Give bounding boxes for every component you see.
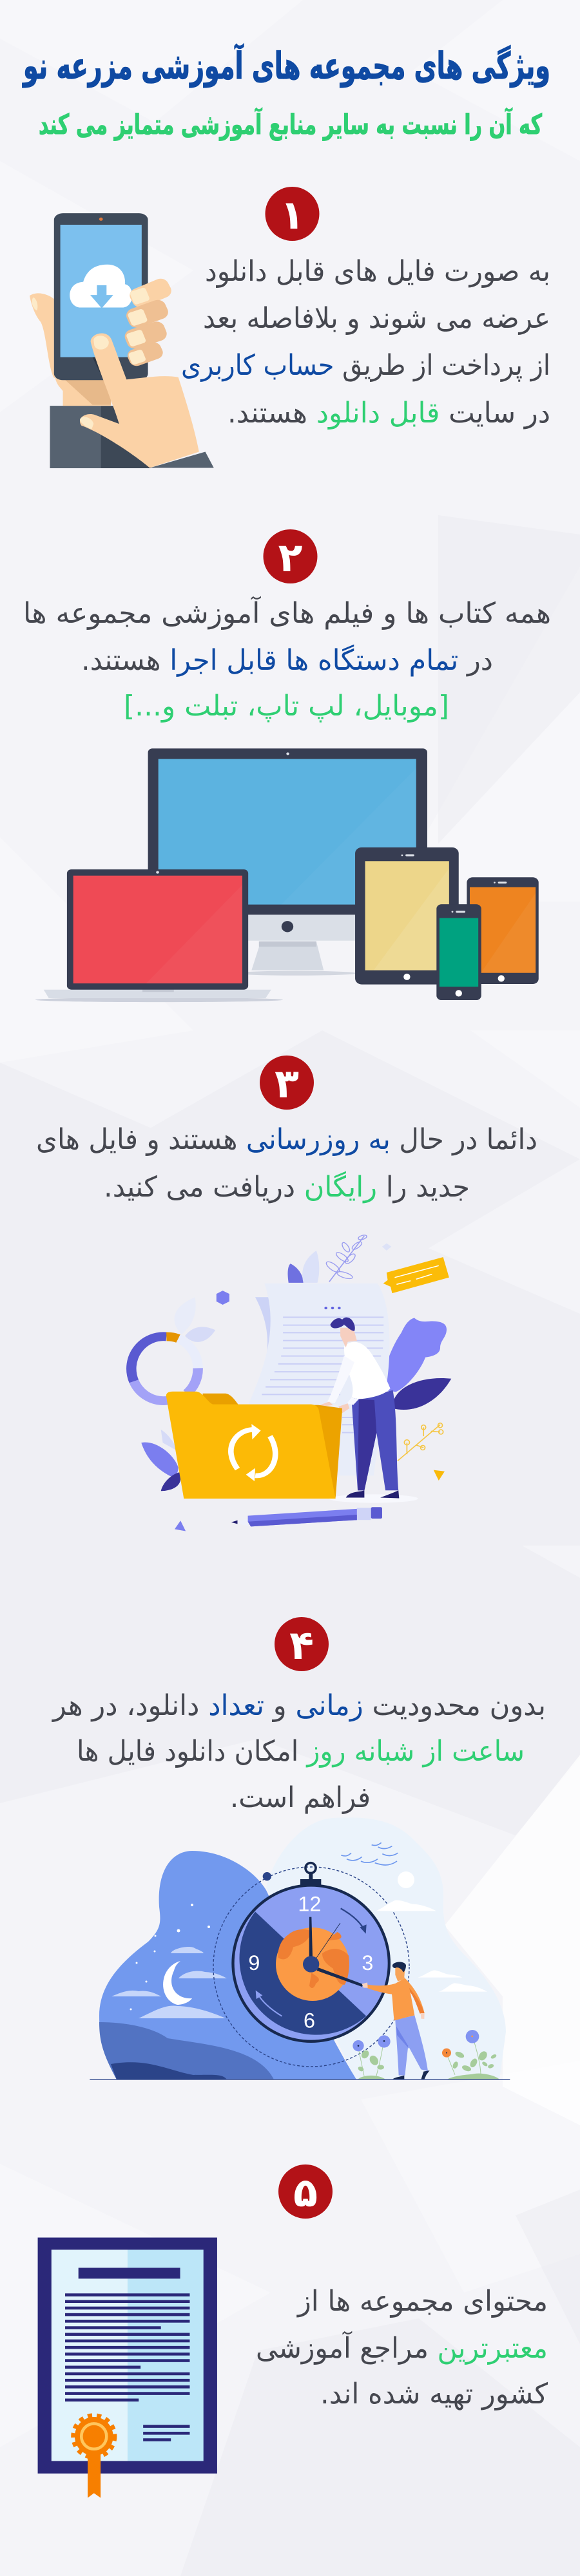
note tag: [383, 1257, 449, 1293]
number badge 4: [275, 1617, 329, 1671]
clock numerals: 9: [248, 1951, 260, 1975]
text: section 1: عرضه می شوند و بلافاصله بعد: [203, 302, 550, 335]
clock numerals: 6: [304, 2009, 315, 2032]
text: section 3: دائما در حال به روزرسانی هستند و فایل های: [36, 1123, 537, 1156]
text: section 1: از پرداخت از طریق حساب کاربری: [181, 349, 550, 382]
clock numerals: 12: [298, 1892, 321, 1915]
illustration: certificate: [38, 2237, 217, 2498]
text: section 5: کشور تهیه شده اند.: [320, 2378, 548, 2410]
text: section 1: [181, 255, 550, 430]
text: section 2: [23, 596, 551, 723]
flowers: [353, 2030, 499, 2079]
number badge 1: ۱: [280, 191, 304, 238]
number badge 3: [260, 1056, 314, 1110]
document: [249, 1283, 390, 1475]
clock body and faces, zoom frame: [90, 1842, 510, 2080]
illustration: clock: [90, 1817, 510, 2080]
number badge 2: ۲: [278, 534, 303, 581]
clock hands: [303, 1917, 363, 1987]
icon: hand holding phone: [30, 213, 214, 468]
person: [320, 1318, 418, 1503]
text: section 5: معتبرترین مراجع آموزشی: [256, 2331, 548, 2365]
number badge 5: [278, 2164, 333, 2219]
folder: [141, 1392, 342, 1499]
number badge 4: ۴: [289, 1622, 314, 1669]
orbit path: [213, 1867, 409, 2067]
leaves and decorations: [175, 1234, 451, 1531]
text: section 3: جدید را رایگان دریافت می کنید.: [104, 1171, 470, 1204]
text: section 4: بدون محدودیت زمانی و تعداد دانلود، در هر: [52, 1689, 546, 1722]
text: section 4: ساعت از شبانه روز امکان دانلود فایل ها: [77, 1735, 525, 1768]
text: section 4: [52, 1689, 546, 1814]
text: section 2: در تمام دستگاه ها قابل اجرا هستند.: [81, 644, 493, 677]
illustration: devices: [35, 748, 539, 1002]
donut chart: [131, 1336, 198, 1401]
text: section 3: [36, 1123, 537, 1204]
man: [362, 1962, 430, 2079]
refresh symbol: [231, 1430, 275, 1475]
number badge 3: ۳: [275, 1060, 299, 1107]
number badge 1: [266, 187, 320, 241]
laptop: [35, 869, 283, 1002]
pale background blob: [266, 1817, 506, 2079]
tablet small: [467, 877, 539, 984]
clock numerals: 3: [362, 1951, 373, 1975]
text: section 2: همه کتاب ها و فیلم های آموزشی مجموعه ها: [23, 596, 551, 630]
number badge 2: [263, 529, 317, 583]
text: section 5: محتوای مجموعه ها از: [296, 2285, 548, 2318]
text: section 1: در سایت قابل دانلود هستند.: [227, 397, 550, 430]
text: section 2: [موبایل، لپ تاپ، تبلت و...]: [124, 690, 449, 723]
panel: section 3 updates: [36, 1056, 537, 1531]
text: section 4: فراهم است.: [230, 1781, 371, 1814]
text: section 1: به صورت فایل های قابل دانلود: [205, 255, 550, 288]
moon, stars and clouds: [111, 1904, 227, 2018]
panel: section 5 references: [38, 2164, 548, 2498]
ground line: [90, 2079, 510, 2080]
phone: [436, 904, 481, 1000]
night blob: [99, 1851, 356, 2079]
clock numerals: [248, 1892, 373, 2032]
panel: section 1 download: [30, 187, 550, 468]
illustration: folder and man: [131, 1234, 451, 1531]
seal: [73, 2416, 114, 2457]
tablet large: [355, 848, 459, 985]
desktop monitor: [148, 748, 427, 976]
text: section 5: [256, 2285, 548, 2410]
pencil: [231, 1507, 382, 1526]
panel: section 4 unlimited: [52, 1617, 546, 2080]
hills: [99, 2022, 274, 2079]
panel: section 2 devices: [23, 529, 551, 1002]
number badge 5: ۵: [293, 2169, 318, 2216]
